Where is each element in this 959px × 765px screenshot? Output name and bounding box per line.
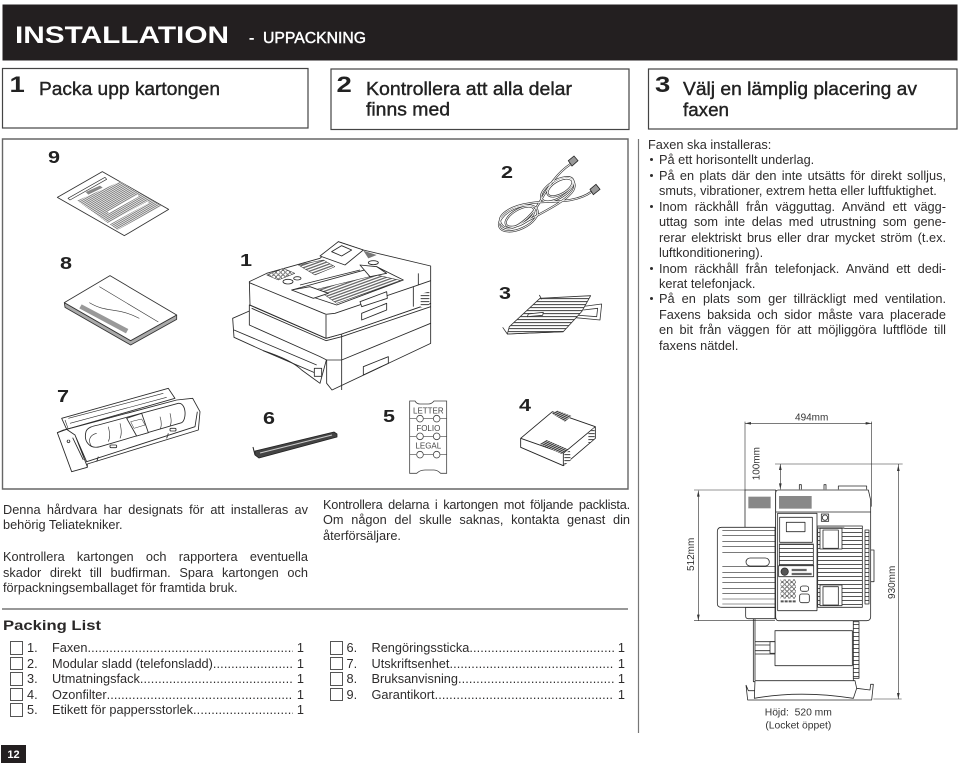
text: placement requirements: luftkonditionering). <box>659 245 763 260</box>
number 6: 6 <box>263 409 275 429</box>
number 9: 9 <box>48 148 60 168</box>
height note: (Locket öppet) <box>765 721 831 732</box>
step 1 heading <box>2 68 308 128</box>
number 7: 7 <box>57 387 69 407</box>
item 5: paper size labels: LETTER <box>413 407 444 416</box>
text: check contents note: Om någon del skulle saknas, kontakta genast din <box>323 512 630 527</box>
text: placement requirements: På ett horisontellt underlag. <box>659 152 814 167</box>
dimension 494mm: 494mm <box>795 413 828 424</box>
packing list: items 1-5: 1 <box>297 687 304 702</box>
packing list: items 6-9: 1 <box>618 656 625 671</box>
packing list: items 1-5: Ozonfilter <box>52 687 107 702</box>
text: placement requirements: Inom räckhåll från telefonjack. Använd ett dedi- <box>659 260 946 276</box>
number 2: 2 <box>501 163 513 183</box>
step 2 heading: Kontrollera att alla delar <box>366 78 572 99</box>
text: placement requirements: Faxens baksida och sidor måste vara placerade <box>659 307 946 322</box>
title: INSTALLATION <box>15 22 229 49</box>
subtitle: - UPPACKNING <box>249 30 366 47</box>
panel: contents frame <box>2 139 628 489</box>
height note <box>765 708 832 732</box>
step 2 heading <box>331 69 629 130</box>
packing list: items 1-5 <box>10 640 304 717</box>
packing list: items 1-5: Modular sladd (telefonsladd) <box>52 656 213 671</box>
step 2 heading: finns med <box>366 98 450 120</box>
packing list: items 1-5: Faxen <box>52 640 87 655</box>
item 5: paper size labels: LEGAL <box>415 442 442 451</box>
packing list: items 1-5: 1. <box>27 640 38 655</box>
packing list: items 1-5: 2. <box>27 656 38 671</box>
text: unpacking notes: förpackningsemballaget för framtida bruk. <box>3 580 238 595</box>
dimension 100mm: 100mm <box>751 447 762 480</box>
number 1: 1 <box>240 251 252 271</box>
packing list: items 6-9: 1 <box>618 640 625 655</box>
dimension 494mm <box>745 413 872 507</box>
text: placement requirements: smuts, vibrationer, extrem hetta eller luftfuktighet. <box>659 183 937 198</box>
text: placement requirements: På en plats där den inte utsätts för direkt solljus, <box>659 168 946 183</box>
text: check contents note: återförsäljare. <box>323 528 401 543</box>
packing list: items 6-9: Rengöringssticka <box>372 640 469 655</box>
page number <box>1 745 26 763</box>
document tray <box>717 527 775 607</box>
packing list: items 1-5: 4. <box>27 687 38 702</box>
dimension 512mm <box>686 490 775 621</box>
number 4: 4 <box>519 396 531 416</box>
text: unpacking notes: skador direkt till budfirman. Spara kartongen och <box>3 565 308 580</box>
dimension 930mm: 930mm <box>887 566 898 599</box>
step 3 heading: faxen <box>683 99 729 120</box>
item 8: user manual <box>64 276 177 345</box>
text: unpacking notes <box>3 502 308 595</box>
packing list: items 6-9: Utskriftsenhet <box>372 656 449 671</box>
text: placement requirements: faxens nätdel. <box>659 338 738 353</box>
step 3 heading <box>648 69 957 129</box>
packing list: items 6-9 <box>330 640 625 702</box>
packing list: items 6-9: Garantikort <box>372 687 435 702</box>
number 8: 8 <box>60 254 72 274</box>
packing list: items 1-5: 1 <box>297 640 304 655</box>
item 9: warranty card <box>57 172 169 236</box>
step 1 heading: 1 <box>10 73 25 97</box>
step 1 heading: Packa upp kartongen <box>39 78 220 99</box>
text: unpacking notes: Kontrollera kartongen och rapportera eventuella <box>3 549 308 564</box>
item 5: paper size labels <box>410 401 447 473</box>
text: placement requirements <box>648 137 946 353</box>
text: placement requirements: Faxen ska installeras: <box>648 137 771 152</box>
packing list: items 1-5: Etikett för pappersstorlek <box>52 702 193 717</box>
number 5: 5 <box>383 407 395 427</box>
item 5: paper size labels: FOLIO <box>416 424 440 433</box>
packing list: items 6-9: 7. <box>346 656 357 671</box>
packing list: items 6-9: 9. <box>346 687 357 702</box>
text: check contents note <box>323 497 630 543</box>
text: check contents note: Kontrollera delarna i kartongen mot följande packlista. <box>323 497 630 512</box>
dimension 930mm <box>873 464 902 699</box>
dimension 100mm <box>751 447 903 489</box>
text: placement requirements: uttag som inte delas med utrustning som gene- <box>659 214 946 229</box>
packing list: items 1-5: 1 <box>297 656 304 671</box>
rear unit <box>745 490 776 619</box>
packing list: items 1-5: 1 <box>297 671 304 686</box>
packing list: items 1-5: 5. <box>27 702 38 717</box>
text: placement requirements: kerat telefonjack. <box>659 276 755 291</box>
step 2 heading: 2 <box>336 73 352 97</box>
item 6: cleaning stick <box>253 432 337 458</box>
item 1: fax machine <box>233 242 431 390</box>
packing list: items 6-9: 1 <box>618 671 625 686</box>
text: placement requirements: På en plats som ger tillräckligt med ventilation. <box>659 291 946 306</box>
item 3: output tray <box>503 295 602 334</box>
packing list: items 6-9: 8. <box>346 671 357 686</box>
header bar <box>2 4 958 60</box>
packing list: items 1-5: 3. <box>27 671 38 686</box>
packing list: items 1-5: 1 <box>297 702 304 717</box>
text: unpacking notes: Denna hårdvara har designats för att installeras av <box>3 502 308 517</box>
packing list: items 6-9: 6. <box>346 640 357 655</box>
height note: Höjd: 520 mm <box>765 708 832 719</box>
item 4: ozone filter <box>521 411 595 466</box>
text: placement requirements: Inom räckhåll från vägguttag. Använd ett vägg- <box>659 199 946 214</box>
packing list: items 1-5: Utmatningsfack <box>52 671 140 686</box>
packing list heading: Packing List <box>3 618 102 633</box>
page number: 12 <box>7 749 20 761</box>
text: placement requirements: rerar elektriskt brus eller drar mycket ström (t.ex. <box>659 230 946 245</box>
text: unpacking notes: behörig Teliatekniker. <box>3 517 123 532</box>
packing list: items 6-9: Bruksanvisning <box>372 671 458 686</box>
number 3: 3 <box>499 284 511 304</box>
text: placement requirements: en bit från väggen för att möjliggöra luftflöde till <box>659 322 946 337</box>
item 7: print unit <box>57 388 200 472</box>
step 3 heading: Välj en lämplig placering av <box>683 78 918 99</box>
lower paper tray <box>746 618 873 700</box>
item 2: telephone cable <box>495 156 600 237</box>
step 3 heading: 3 <box>655 73 670 97</box>
main body <box>776 485 874 621</box>
packing list: items 6-9: 1 <box>618 687 625 702</box>
dimension drawing: fax top view <box>686 413 903 732</box>
dimension 512mm: 512mm <box>686 538 697 571</box>
